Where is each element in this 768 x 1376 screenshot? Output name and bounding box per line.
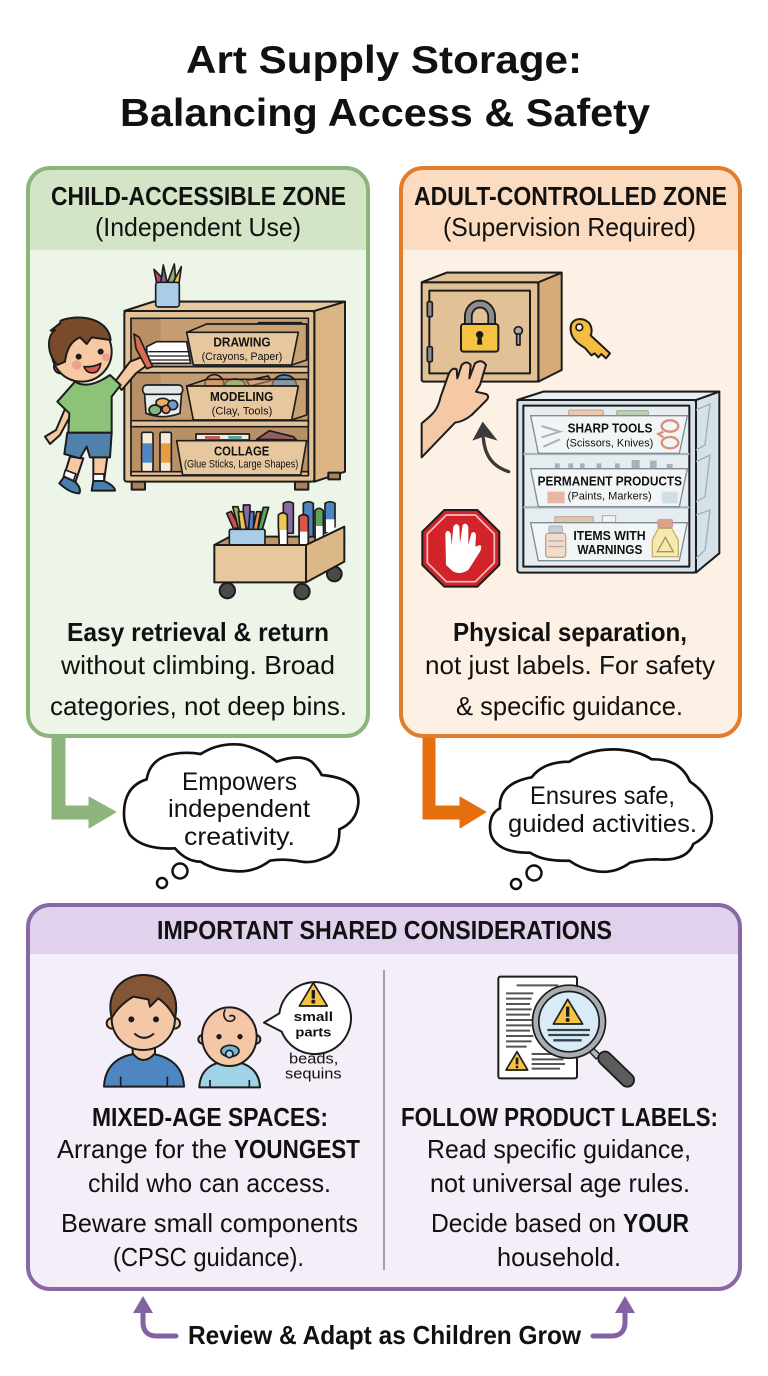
heading: adult zone: (Supervision Required) [443,212,696,242]
heading: adult zone [414,181,727,242]
heading: shared considerations: IMPORTANT SHARED CONSIDERATIONS [157,915,612,945]
text: mixed-age spaces: Arrange for the [57,1134,227,1164]
text: follow product labels: FOLLOW PRODUCT LABELS: [401,1102,718,1132]
text: follow product labels: Decide based on [431,1208,616,1238]
text: child zone description: categories, not deep bins. [50,691,347,721]
heading: child zone: CHILD-ACCESSIBLE ZONE [51,181,346,211]
bin: collage: COLLAGE [214,445,269,459]
text: follow product labels: not universal age rules. [430,1168,690,1198]
icon: label under magnifying glass [498,977,627,1080]
thought bubble: empowers: independent [168,795,310,823]
text: child zone description: without climbing. Broad [60,650,335,680]
arrow: left loop [133,1296,176,1336]
heading: child zone [51,181,346,242]
thought bubble: ensures: Ensures safe, [530,782,675,810]
label: review and adapt: Review & Adapt as Children Grow [188,1320,582,1350]
icon: baby with pacifier [198,1007,260,1087]
text: follow product labels: YOUR [623,1208,689,1238]
bin: items with warnings: WARNINGS [577,543,642,557]
bin: drawing [187,324,307,365]
bin: collage: (Glue Sticks, Large Shapes) [184,458,298,470]
bin: drawing: DRAWING [213,336,271,350]
text: mixed-age spaces: MIXED-AGE SPACES: [92,1102,328,1132]
text: mixed-age spaces: YOUNGEST [234,1134,360,1164]
bin: modeling: (Clay, Tools) [212,406,273,418]
callout: small parts warning: beads, [289,1050,338,1067]
text: child zone description [50,617,347,721]
icon: adult hand [422,361,488,457]
illustration: locked storage cabinet [517,392,719,573]
thought bubble: empowers [124,744,358,888]
text: adult zone description [425,617,715,721]
text: follow product labels: Read specific guidance, [427,1134,691,1164]
arrow: adult zone to thought [423,738,486,828]
panel: shared considerations [28,905,740,1289]
bin: modeling: MODELING [210,390,273,404]
illustration: bookshelf [124,302,345,490]
bin: drawing: (Crayons, Paper) [202,351,283,363]
thought bubble: empowers: Empowers [182,768,297,796]
thought bubble: ensures: guided activities. [508,810,697,838]
panel: child-accessible zone [28,168,368,736]
bin: sharp tools: SHARP TOOLS [568,421,652,435]
icon: pencil cup [154,264,181,307]
text: adult zone description: & specific guidance. [456,691,683,721]
callout: small parts warning: sequins [285,1066,342,1083]
thought bubble: ensures [490,749,712,889]
panel: adult-controlled zone [401,168,740,736]
bin: permanent products [531,469,687,507]
text: mixed-age spaces: (CPSC guidance). [113,1242,304,1272]
thought bubble: empowers: creativity. [184,823,295,851]
arrow: right loop [593,1296,635,1336]
bin: collage [177,441,307,475]
bin: permanent products: (Paints, Markers) [568,490,652,502]
heading: adult zone: ADULT-CONTROLLED ZONE [414,181,727,211]
title: Art Supply Storage: [186,39,582,82]
icon: older child [104,975,184,1087]
illustration: child [45,318,153,493]
text: child zone description: Easy retrieval & return [67,617,329,647]
title: Balancing Access & Safety [120,92,650,135]
bin: permanent products: PERMANENT PRODUCTS [538,475,682,489]
footer: review and adapt loop [133,1296,635,1350]
heading: child zone: (Independent Use) [95,212,301,242]
icon: key [571,319,610,358]
arrow: child zone to thought [52,738,116,828]
callout: small parts warning: small [294,1009,333,1024]
icon: stop hand sign [422,510,499,587]
arrow: cabinet to hand [472,422,509,472]
bin: items with warnings [531,519,687,561]
callout: small parts warning: parts [295,1024,331,1039]
illustration: rolling cart [214,502,344,599]
text: adult zone description: not just labels. For safety [425,650,715,680]
bin: modeling [187,379,307,420]
text: mixed-age spaces: child who can access. [88,1168,331,1198]
bin: sharp tools: (Scissors, Knives) [566,438,653,450]
text: adult zone description: Physical separation, [453,617,687,647]
text: follow product labels [401,1102,718,1272]
text: mixed-age spaces: Beware small components [61,1208,358,1238]
icon: locked safe [422,273,562,382]
bin: items with warnings: ITEMS WITH [573,529,646,543]
title [120,39,650,135]
text: mixed-age spaces [57,1102,360,1272]
text: follow product labels: household. [497,1242,621,1272]
bin: sharp tools [531,416,687,453]
callout: small parts warning [264,982,351,1083]
